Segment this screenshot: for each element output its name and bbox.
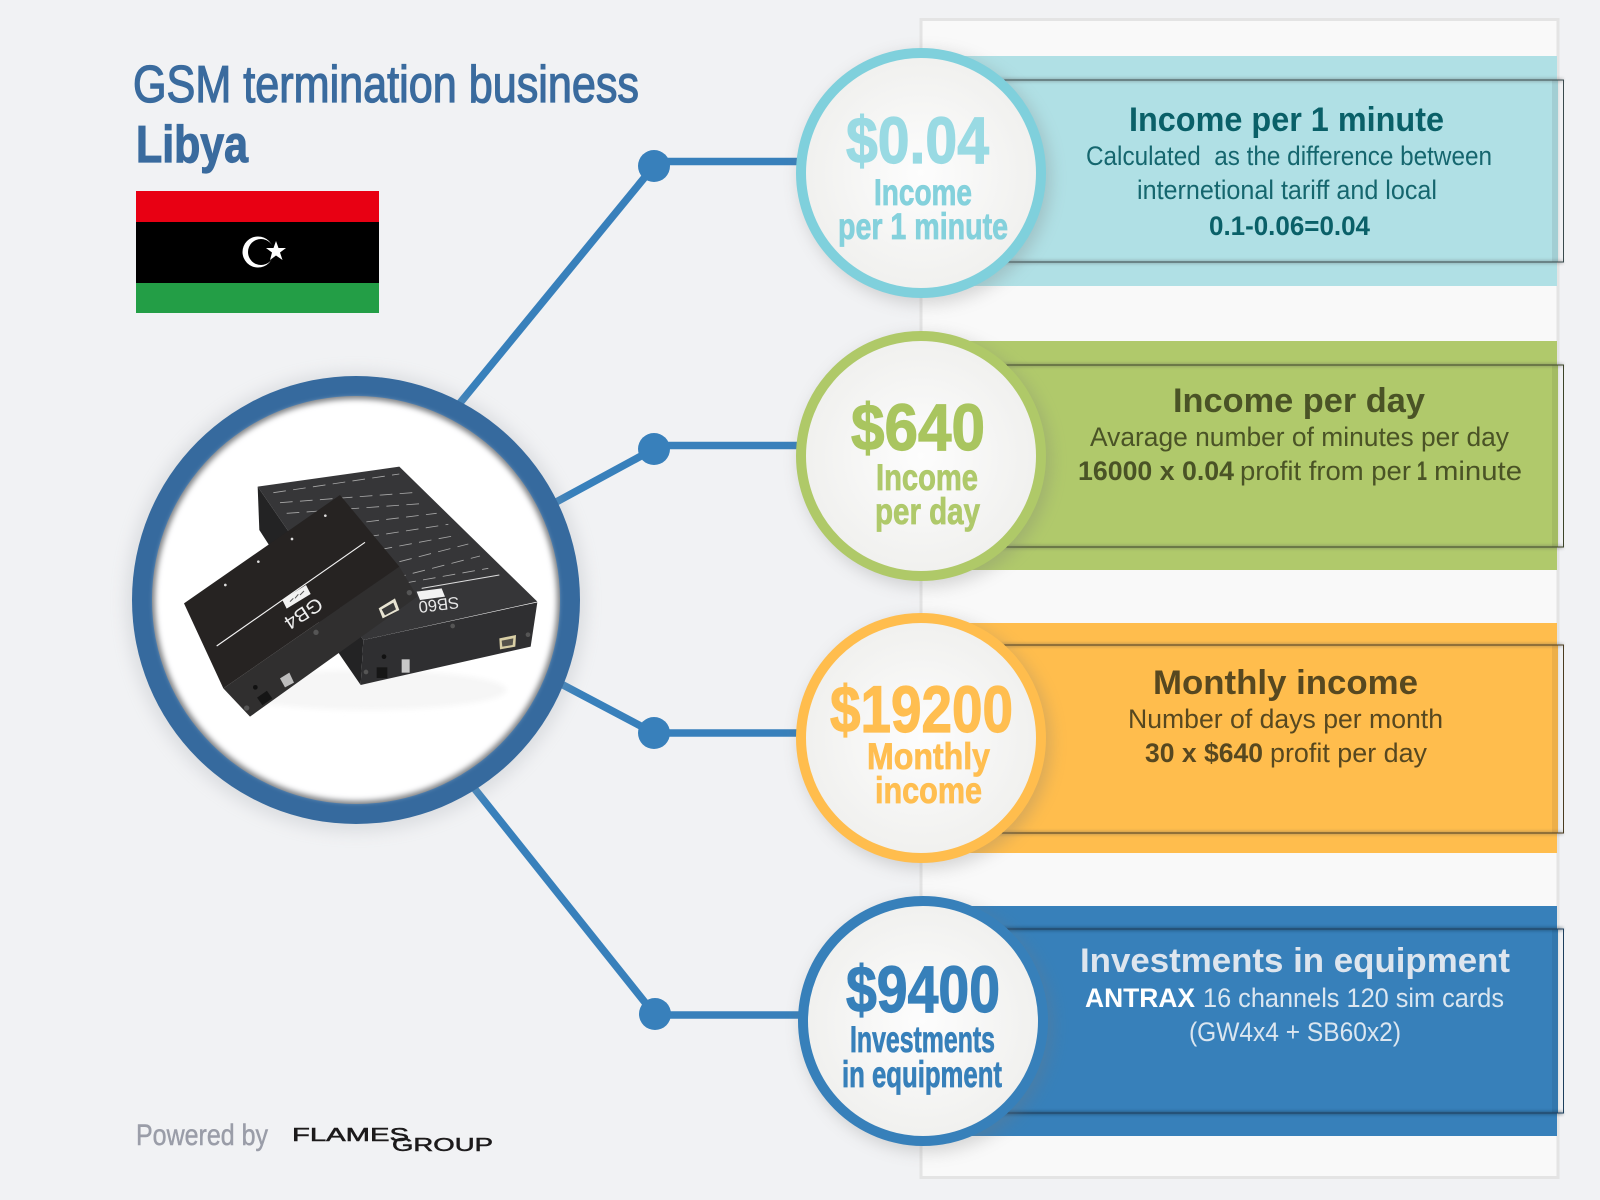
title: Libya [136,116,249,174]
label [838,172,1008,247]
label: per day [875,491,980,532]
text block: income per day: Income per day [1173,382,1425,420]
text block: income per 1 minute [1086,101,1492,241]
value: $640 [851,390,985,464]
text block: investments in equipment [1080,942,1510,1047]
photo: SB60 and GB4 gateway devices: SB60 [417,593,460,617]
text block: monthly income: 30 x $640 [1145,738,1263,768]
label: per 1 minute [838,206,1008,247]
central device circle [126,372,586,832]
text block: income per day: 16000 x 0.04 [1078,456,1234,486]
logo: Flames Group [292,1125,493,1155]
text block: income per day: 1 [1417,456,1427,486]
text block: income per 1 minute: internetional tariff and local [1137,175,1437,205]
text block: monthly income [1128,664,1443,768]
text block: investments in equipment: (GW4x4 + SB60x2) [1189,1017,1401,1047]
label: Income [874,172,972,213]
label: Investments [850,1019,995,1060]
connector: income per day [440,433,800,565]
label: Monthly [867,736,990,777]
band: income per day [950,341,1564,570]
text block: income per day: minute [1434,456,1522,486]
value: $9400 [846,952,1000,1026]
label: in equipment [842,1054,1002,1095]
circle: $640 income per day [799,335,1051,587]
connector: monthly income [440,620,800,749]
text block: income per day: Avarage number of minutes per day [1090,422,1509,452]
footer: powered by: Powered by [136,1119,268,1152]
circle: $9400 investments in equipment [801,900,1053,1152]
text block: monthly income: Number of days per month [1128,704,1443,734]
value: $0.04 [846,103,989,177]
logo: Flames Group: GROUP [392,1135,493,1155]
text block: income per day [1078,382,1522,486]
circle: $0.04 income per 1 minute [799,52,1051,304]
logo: Flames Group: FLAMES [292,1125,409,1145]
text block: income per day: profit from per [1240,456,1411,486]
label: income [875,770,982,811]
label [842,1019,1002,1095]
band: investments in equipment [950,906,1564,1136]
title: GSM termination business [133,56,639,114]
icon: Libyan flag [136,191,379,313]
title [133,56,639,174]
white background panel [921,20,1558,1178]
text block: investments in equipment: Investments in equipment [1080,942,1510,980]
text block: income per 1 minute: Calculated as the difference between [1086,141,1492,171]
text block: monthly income: Monthly income [1153,664,1418,702]
photo: SB60 and GB4 gateway devices: GB4 [279,592,326,633]
label [867,736,990,811]
text block: income per 1 minute: Income per 1 minute [1129,101,1444,139]
label: Income [876,457,978,498]
band: income per 1 minute [950,56,1564,286]
text block: monthly income: profit per day [1270,738,1427,768]
band: monthly income [950,623,1564,853]
text block: investments in equipment: 16 channels 120 sim cards [1203,983,1504,1013]
circle: $19200 monthly income [799,617,1051,869]
text block: investments in equipment: ANTRAX [1085,983,1195,1013]
photo: SB60 and GB4 gateway devices [184,467,537,717]
value: $19200 [830,672,1013,746]
connector: investments [356,640,800,1030]
label [875,457,980,532]
connector: top income per minute [356,150,800,530]
text block: income per 1 minute: 0.1-0.06=0.04 [1209,211,1370,241]
